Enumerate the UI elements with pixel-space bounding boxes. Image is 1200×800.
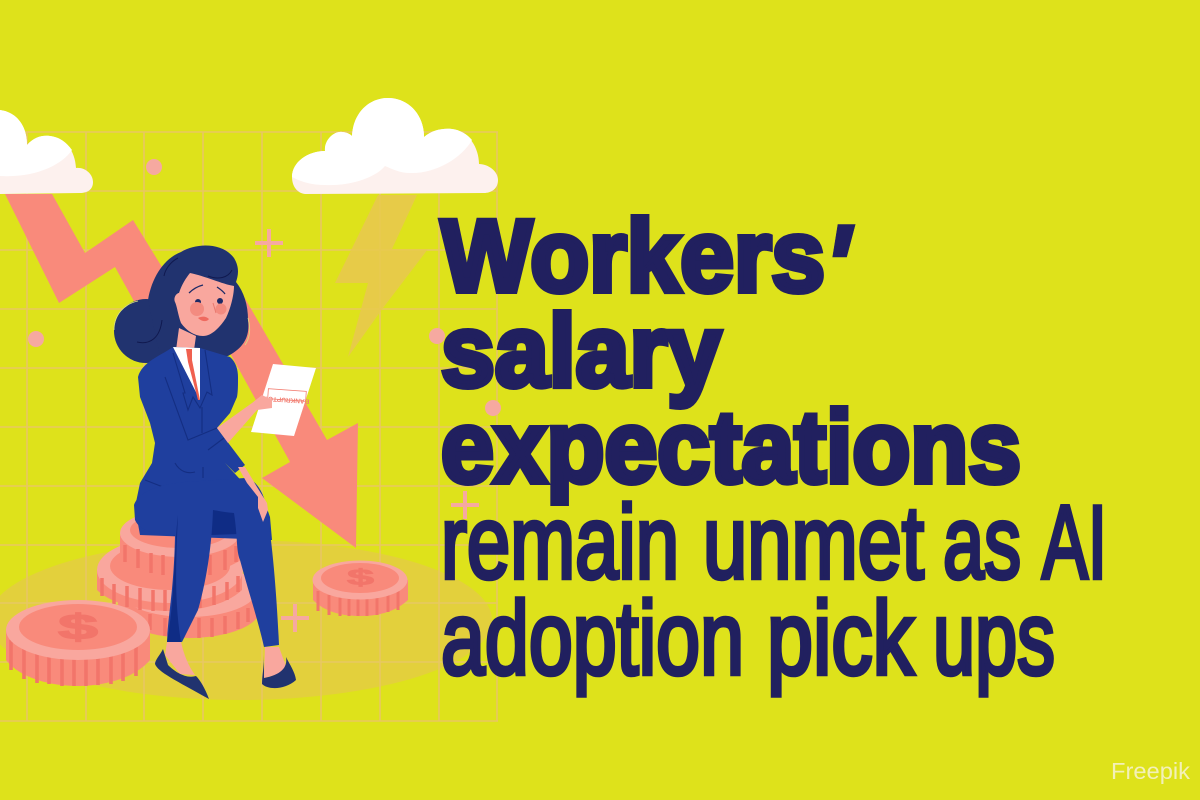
ground shadow bbox=[0, 540, 492, 700]
title bbox=[441, 196, 1107, 697]
coin: small right bbox=[312, 560, 408, 616]
title line: adoption pick ups: pick bbox=[767, 581, 915, 697]
face bbox=[174, 273, 234, 336]
title line: remain unmet as AI: unmet bbox=[703, 485, 924, 601]
arrow: falling trend bbox=[5, 194, 358, 548]
blazer bbox=[135, 347, 272, 540]
document bbox=[251, 364, 316, 436]
title line: adoption pick ups: adoption bbox=[441, 581, 744, 697]
decorative dots and plus signs bbox=[28, 159, 501, 632]
neck bbox=[176, 328, 196, 350]
title line: salary: salary bbox=[441, 294, 721, 408]
coin: large front bbox=[6, 600, 150, 686]
shoes and feet bbox=[155, 642, 296, 699]
watermark credit: Freepik bbox=[1111, 758, 1191, 784]
trousers bbox=[134, 478, 279, 647]
coin: large front: $ bbox=[58, 608, 98, 647]
right forearm and hand bbox=[217, 395, 272, 443]
illustration: worried woman bbox=[114, 246, 316, 699]
title line: remain unmet as AI: AI bbox=[1042, 485, 1107, 601]
title line: adoption pick ups bbox=[441, 581, 1055, 697]
title line: adoption pick ups: ups bbox=[933, 581, 1055, 697]
title line: Workers: ' bbox=[806, 196, 868, 342]
icon: right cloud bbox=[292, 98, 498, 194]
title line: remain unmet as AI: as bbox=[943, 485, 1021, 601]
coin: stack middle bbox=[97, 537, 243, 611]
title line: expectations: expectations bbox=[441, 390, 1021, 504]
left hand on knee bbox=[238, 467, 268, 522]
shirt and tie bbox=[145, 347, 224, 503]
hair bbox=[114, 246, 250, 363]
facial features bbox=[189, 285, 226, 321]
illustration: coin stack bbox=[97, 509, 257, 638]
icon: lightning bolt bbox=[335, 195, 428, 357]
title line: remain unmet as AI bbox=[441, 485, 1107, 601]
title line: remain unmet as AI: remain bbox=[441, 485, 679, 601]
coin: stack bottom bbox=[118, 563, 257, 638]
document: BANKRUPTCY bbox=[263, 394, 310, 405]
coin: small right: $ bbox=[347, 565, 374, 590]
title line: Workers: Workers bbox=[441, 199, 825, 313]
coin: stack top bbox=[120, 509, 241, 575]
icon: left cloud bbox=[0, 110, 93, 194]
seat shadow bbox=[135, 510, 240, 536]
